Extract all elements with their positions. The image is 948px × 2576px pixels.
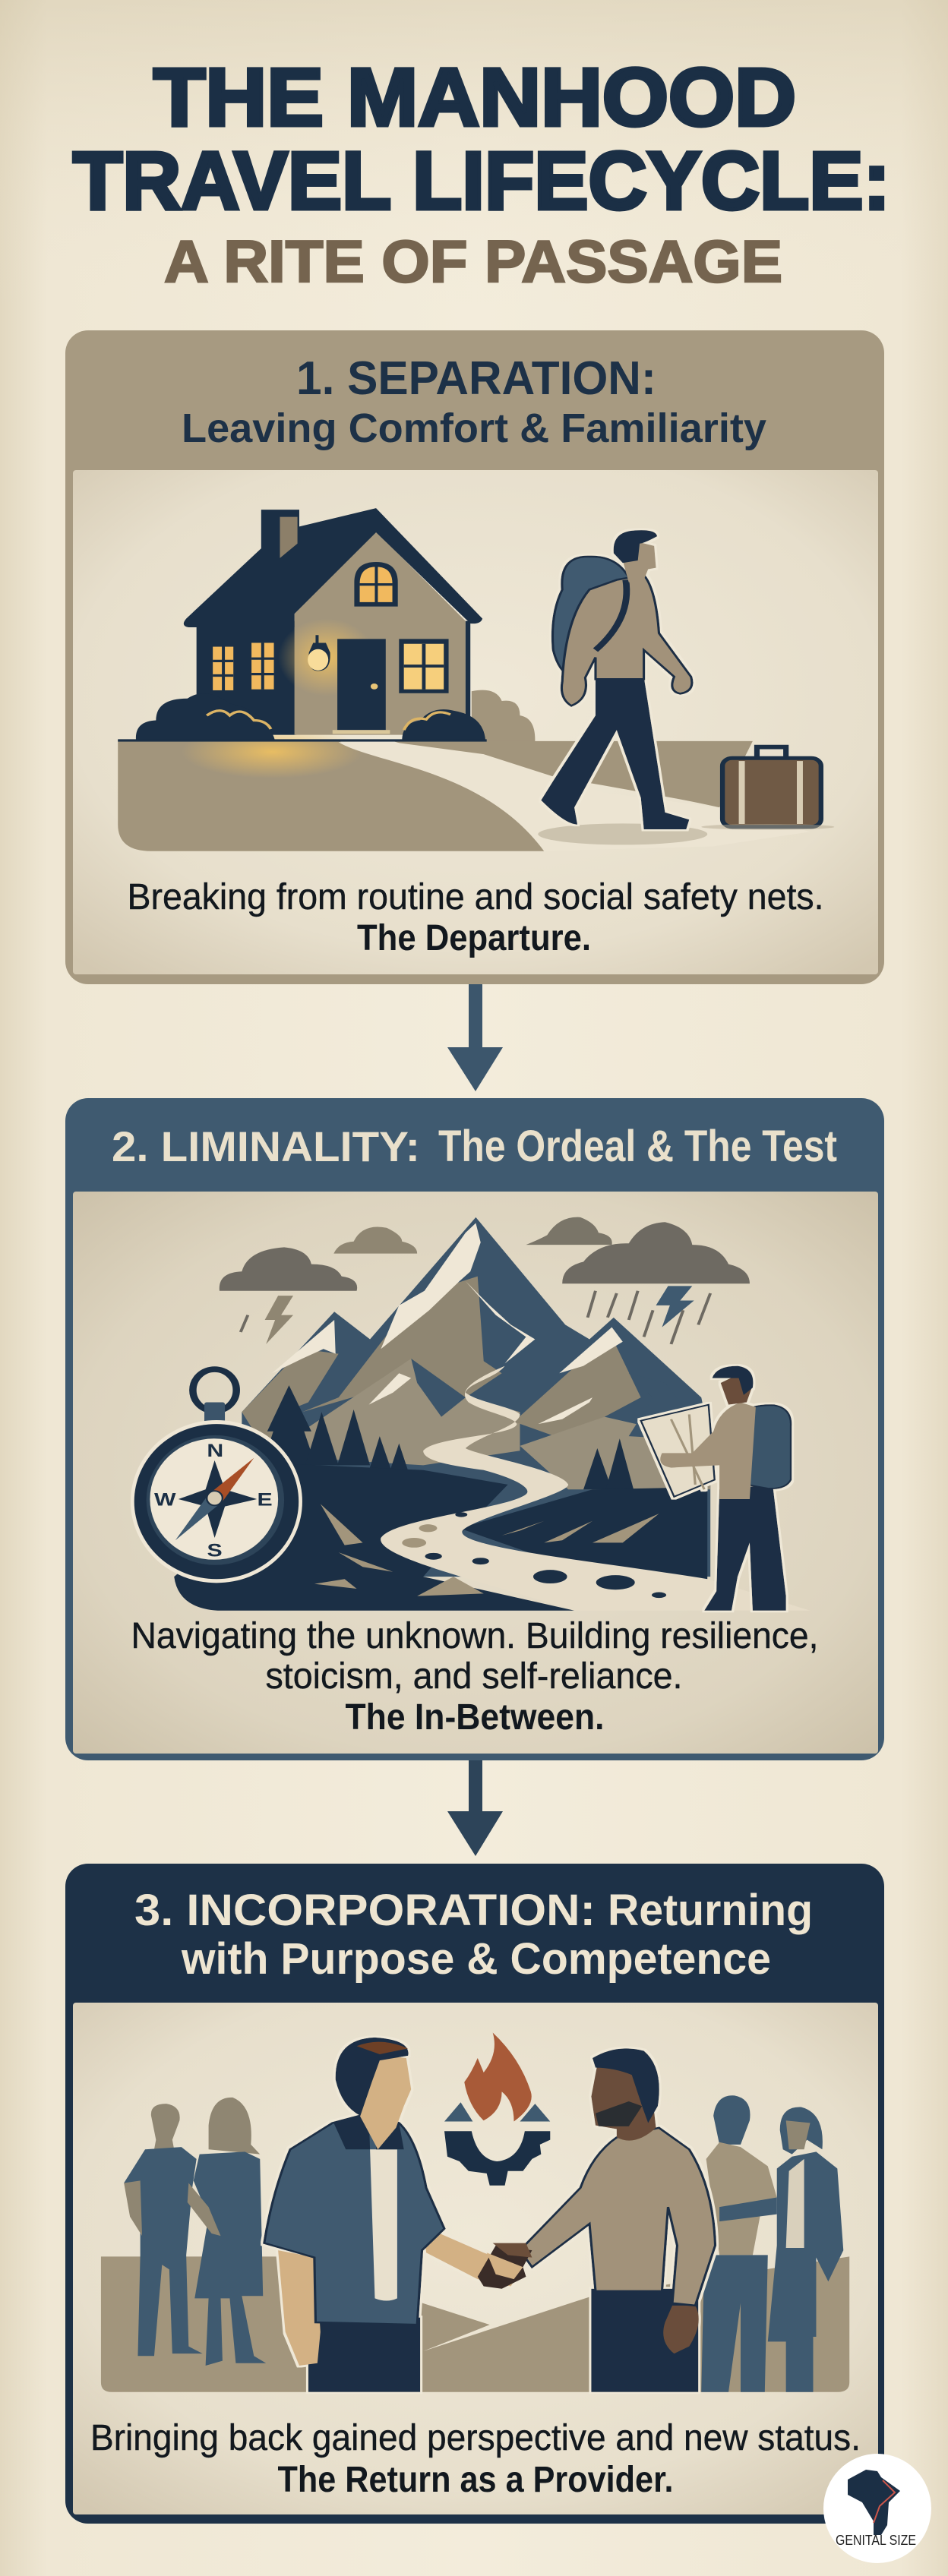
icon: walking man with backpack: [541, 530, 692, 829]
heading: liminality: The Ordeal & The Test: [438, 1122, 837, 1171]
panel: liminality: [65, 1098, 884, 1760]
body text: separation: [128, 877, 823, 958]
icon: fire and gear emblem: [444, 2032, 550, 2186]
arrow: liminality to incorporation: [447, 1760, 503, 1856]
icon: compass: [131, 1369, 302, 1583]
heading: liminality: 2. LIMINALITY:: [112, 1122, 420, 1170]
icon: compass: S: [207, 1539, 223, 1561]
body text: incorporation: The Return as a Provider.: [278, 2460, 673, 2500]
body text: separation: Breaking from routine and social safety nets.: [128, 877, 823, 917]
body text: incorporation: [90, 2418, 861, 2500]
body text: liminality: The In-Between.: [345, 1697, 605, 1738]
logo badge: genital size: [823, 2454, 931, 2563]
icon: hiker with map: [641, 1366, 791, 1611]
heading: incorporation: [134, 1886, 813, 1984]
icon: left man: [264, 2038, 523, 2392]
icon: compass: W: [154, 1488, 176, 1510]
icon: compass: E: [258, 1488, 273, 1510]
title: TRAVEL LIFECYCLE:: [73, 134, 890, 226]
icon: storm clouds: [220, 1217, 750, 1344]
icon: winding trail: [381, 1366, 811, 1611]
heading: separation: 1. SEPARATION:: [296, 352, 656, 405]
illustration: leaving home: [118, 508, 834, 851]
icon: dark foreground and trees: [174, 1385, 707, 1611]
icon: background people left: [124, 2098, 266, 2366]
icon: compass: N: [207, 1440, 223, 1460]
body text: liminality: Navigating the unknown. Building resilience,: [131, 1616, 819, 1656]
icon: right man: [520, 2048, 716, 2392]
icon: background people right: [701, 2095, 843, 2392]
panel: incorporation: [65, 1864, 884, 2524]
title: THE MANHOOD: [153, 51, 796, 143]
icon: shrubs: [136, 693, 485, 740]
body text: separation: The Departure.: [357, 918, 591, 958]
illustration: mountain ordeal: [131, 1217, 811, 1611]
title: A RITE OF PASSAGE: [164, 228, 782, 295]
arrow: separation to liminality: [447, 984, 503, 1091]
icon: mountains: [242, 1217, 710, 1577]
heading: incorporation: 3. INCORPORATION:: [134, 1886, 596, 1935]
ground hills: [101, 2256, 849, 2392]
heading: liminality: [112, 1122, 837, 1171]
icon: suitcase: [701, 747, 834, 830]
icon: handshake hands: [478, 2243, 532, 2289]
icon: house: [184, 508, 482, 735]
heading: separation: [182, 352, 766, 451]
body text: liminality: stoicism, and self-reliance.: [266, 1656, 682, 1697]
body text: incorporation: Bringing back gained perspective and new status.: [90, 2418, 861, 2458]
heading: incorporation: Returning: [608, 1886, 813, 1935]
illustration: handshake: [101, 2032, 849, 2392]
title: [73, 51, 890, 295]
heading: incorporation: with Purpose & Competence: [181, 1934, 771, 1984]
panel: separation: [65, 330, 884, 984]
body text: liminality: [131, 1616, 819, 1738]
logo badge: genital size: GENITAL SIZE: [836, 2533, 916, 2548]
heading: separation: Leaving Comfort & Familiarity: [182, 406, 766, 451]
